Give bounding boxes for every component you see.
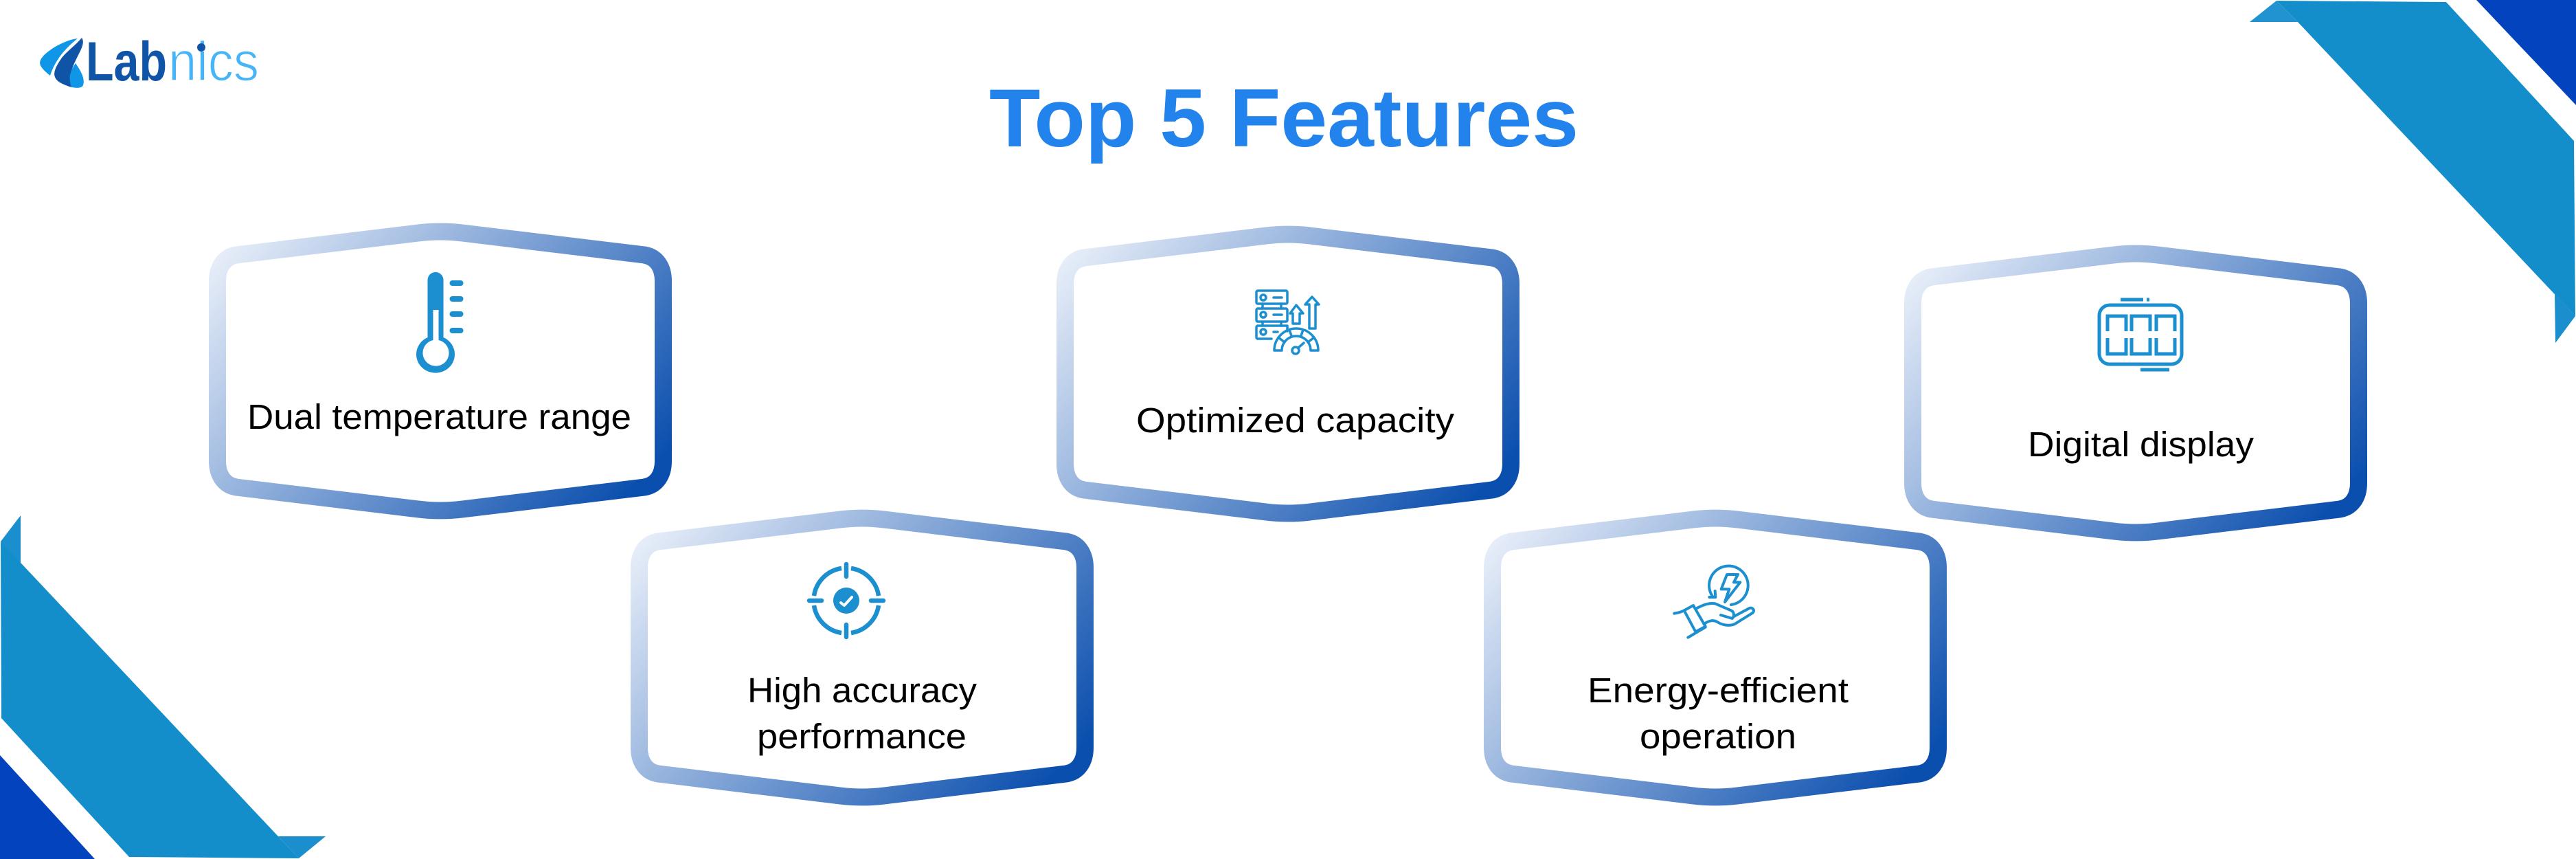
bottom-left corner decoration bbox=[0, 515, 326, 859]
label: Digital display bbox=[2028, 425, 2255, 464]
label: operation bbox=[1640, 717, 1796, 756]
label: Energy-efficient bbox=[1588, 671, 1849, 710]
panel: energy-efficient operation bbox=[1492, 518, 1939, 797]
icon: target with check bbox=[809, 564, 883, 637]
panel: dual temperature range bbox=[217, 232, 664, 511]
label bbox=[1588, 671, 1849, 756]
icon: servers with gauge bbox=[1256, 291, 1319, 354]
logo wordmark nics: nics bbox=[168, 31, 259, 93]
logo wordmark Lab: Lab bbox=[86, 31, 167, 93]
label: performance bbox=[757, 717, 967, 756]
label: High accuracy bbox=[747, 671, 978, 710]
title: Top 5 Features bbox=[989, 72, 1579, 164]
top-right corner decoration bbox=[2250, 0, 2576, 343]
icon: digital display bbox=[2099, 300, 2182, 370]
panel: digital display bbox=[1912, 254, 2359, 533]
label: Optimized capacity bbox=[1136, 401, 1455, 440]
icon: thermometer bbox=[416, 272, 463, 373]
logo i dot bbox=[197, 43, 205, 52]
logo: Labnics bbox=[40, 31, 259, 93]
label bbox=[747, 671, 978, 756]
panel: high accuracy performance bbox=[639, 518, 1085, 797]
label: Dual temperature range bbox=[247, 397, 631, 436]
panel: optimized capacity bbox=[1065, 234, 1511, 513]
logo mark bbox=[40, 38, 84, 88]
icon: hand with energy bolt bbox=[1674, 566, 1754, 638]
